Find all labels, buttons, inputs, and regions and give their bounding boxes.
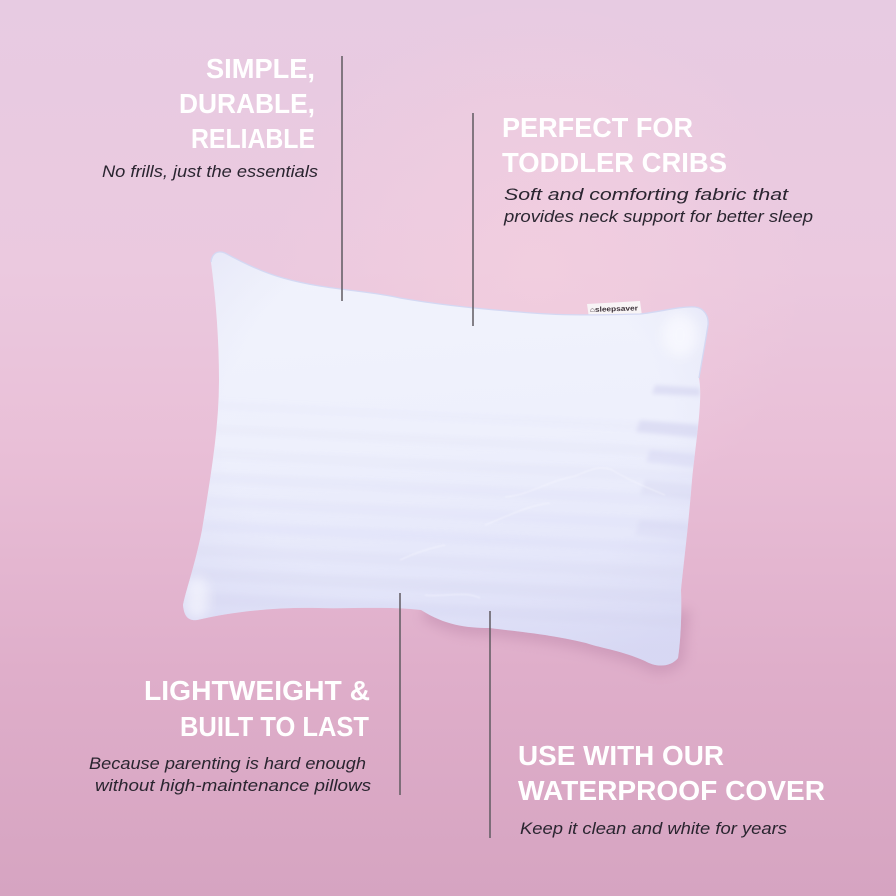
heading: USE WITH OUR — [518, 740, 724, 771]
heading — [518, 740, 825, 806]
heading: WATERPROOF COVER — [518, 775, 825, 806]
callout: use with waterproof cover — [518, 740, 825, 838]
callout: perfect for toddler cribs — [502, 112, 813, 226]
description — [503, 185, 813, 226]
pointer line 4 — [489, 611, 491, 838]
pillow body — [183, 252, 708, 666]
heading: SIMPLE, — [206, 53, 315, 84]
pillow stripes and wrinkles — [191, 252, 700, 612]
heading — [502, 112, 727, 178]
heading: BUILT TO LAST — [180, 711, 369, 742]
callout: lightweight and built to last — [89, 675, 372, 795]
heading — [144, 675, 370, 742]
pointer line 3 — [399, 593, 401, 795]
description: Keep it clean and white for years — [520, 819, 788, 838]
heading: LIGHTWEIGHT & — [144, 675, 370, 706]
heading: RELIABLE — [191, 123, 315, 154]
description: No frills, just the essentials — [102, 162, 319, 181]
heading: TODDLER CRIBS — [502, 147, 727, 178]
heading: DURABLE, — [179, 88, 315, 119]
pointer line 2 — [472, 113, 474, 326]
pointer line 1 — [341, 56, 343, 301]
callout: simple, durable, reliable — [102, 53, 319, 181]
description — [89, 754, 372, 795]
description: provides neck support for better sleep — [503, 207, 813, 226]
description: without high-maintenance pillows — [95, 776, 372, 795]
heading — [179, 53, 315, 154]
heading: PERFECT FOR — [502, 112, 693, 143]
sleepsaver label: ⌂sleepsaver — [590, 305, 638, 314]
description: Soft and comforting fabric that — [504, 185, 790, 204]
pillow photo — [170, 240, 720, 680]
sleepsaver label — [587, 301, 642, 318]
pillow shadow — [421, 600, 690, 673]
pillow piping — [211, 252, 708, 378]
description: Because parenting is hard enough — [89, 754, 366, 773]
